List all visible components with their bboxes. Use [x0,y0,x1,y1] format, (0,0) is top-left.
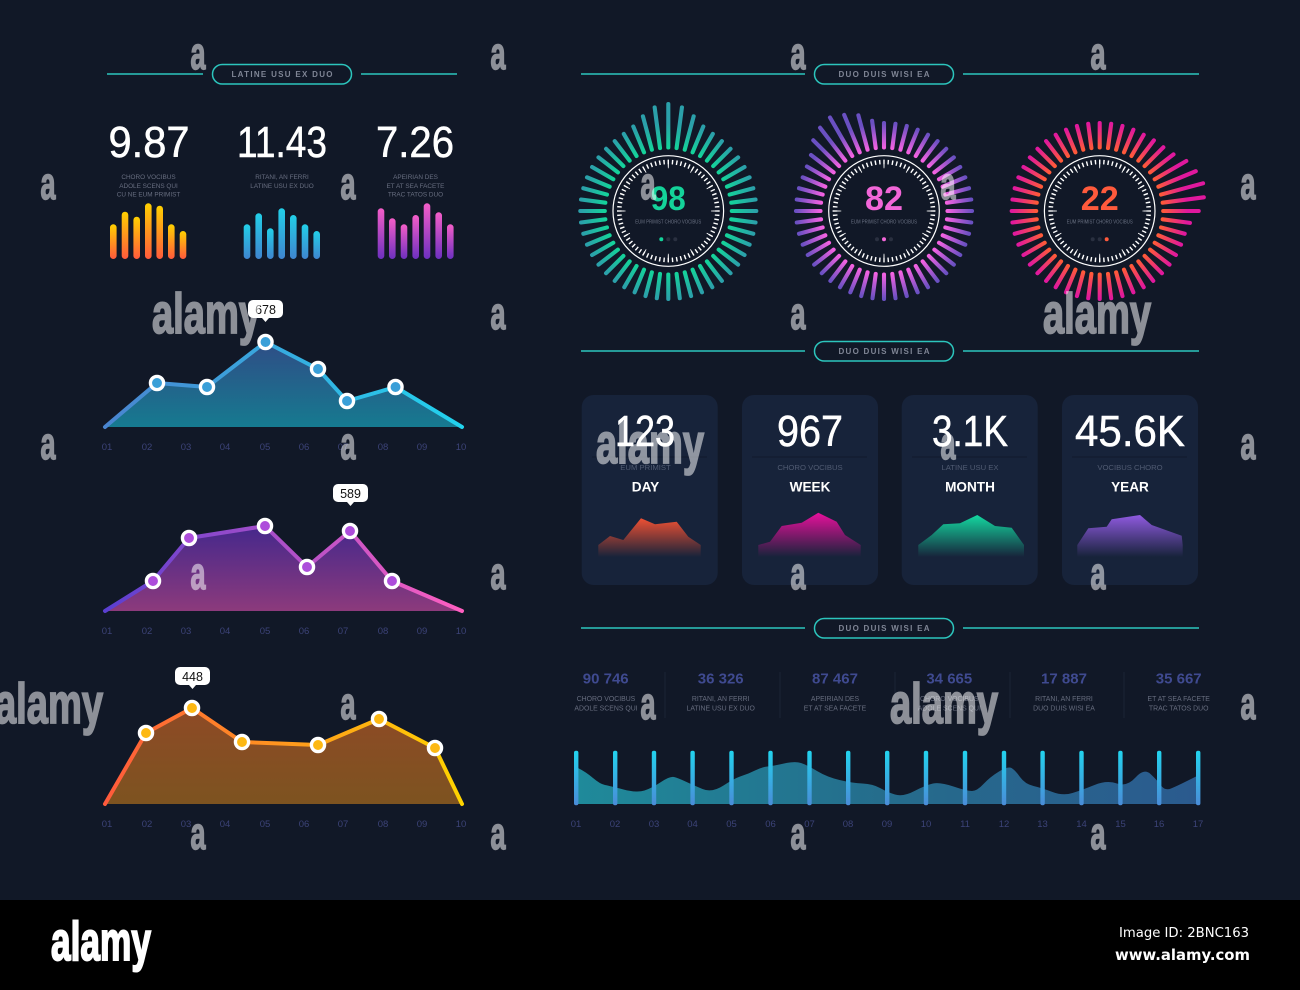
stat: 87 467: 87 467 [812,670,858,688]
watermark: letter marks [40,28,1256,859]
watermark: letter marks: a [340,678,356,729]
mini area: day [598,518,701,557]
watermark: letter marks: a [190,28,206,79]
footer band: Image ID: 2BNC163 [1119,925,1249,941]
stat: 11.43: 11.43 [237,118,327,167]
header: gauges: DUO DUIS WISI EA [838,70,930,79]
footer band [0,900,1300,990]
tooltip: 678: 678 [255,303,276,317]
line chart: blue 678 [102,300,466,453]
axis labels: 16 [1154,819,1164,830]
gauge: 98 [580,104,756,299]
axis labels: 04 [220,442,230,453]
axis labels: 04 [687,819,698,830]
stat: 34 665: CHORO VOCIBUS [920,696,979,703]
axis labels: 13 [1037,819,1048,830]
axis labels: 03 [181,819,191,830]
axis labels: 02 [142,442,152,453]
stat: 17 887: DUO DUIS WISI EA [1033,706,1095,712]
axis labels: 01 [571,819,581,830]
axis labels: 07 [338,626,348,637]
dial [829,156,939,266]
card: year: 45.6K [1075,407,1185,456]
card: day: DAY [632,480,659,494]
axis labels: 03 [181,442,191,453]
stat: 17 887 [1033,670,1095,712]
header: timeline [581,618,1199,638]
header: gauges [581,64,1199,84]
stat: 9.87 [108,118,190,259]
axis labels: 05 [726,819,737,830]
tooltip: 448: 448 [182,670,203,684]
stat: 36 326: RITANI, AN FERRI [692,696,750,703]
axis labels: 06 [299,442,309,453]
card: week [742,395,878,585]
watermark: letter marks: a [340,418,356,469]
watermark: letter marks: a [1240,158,1256,209]
axis labels: 08 [378,626,388,637]
gauge: 82: 82 [865,180,903,218]
axis labels: 05 [260,626,270,637]
footer band: www.alamy.com [1115,946,1250,964]
axis labels: 09 [417,626,427,637]
tooltip: 448 [175,667,210,689]
mini bar chart: orange [110,203,186,259]
stat: 90 746: ADOLE SCENS QUI [574,706,638,712]
axis labels: 07 [338,819,348,830]
axis labels: 05 [260,442,270,453]
mini area: week [758,513,861,557]
watermark: letter marks: a [790,548,806,599]
axis labels: 11 [960,819,970,830]
vertical bars [574,751,1200,805]
watermark: letter marks: a [490,548,506,599]
axis labels: 15 [1115,819,1126,830]
axis labels [102,819,466,830]
gauge: 22: 22 [1081,180,1119,218]
axis labels: 03 [181,626,191,637]
stat: 35 667: 35 667 [1156,670,1202,688]
axis labels: 07 [338,442,348,453]
card: week: WEEK [790,480,831,494]
axis labels: 06 [299,626,309,637]
tooltip: 589 [333,484,368,506]
card: day: EUM PRIMIST [620,463,671,472]
stat: 9.87: CHORO VOCIBUS [121,174,176,181]
card: month: 3.1K [932,407,1008,456]
stat: 90 746 [574,670,638,712]
axis labels: 09 [417,819,427,830]
axis labels [102,626,466,637]
watermark: word marks: alamy [152,282,260,346]
watermark: letter marks: a [40,418,56,469]
mini bar chart: purple [378,203,454,259]
card: week: 967 [777,407,843,456]
mini area: year [1077,515,1183,557]
axis labels: 10 [921,819,931,830]
axis labels: 14 [1076,819,1087,830]
tooltip: 678 [248,300,283,322]
card: year: VOCIBUS CHORO [1097,463,1163,472]
axis labels: 08 [843,819,853,830]
watermark: letter marks: a [940,158,956,209]
wave chart [571,751,1203,830]
card: month: MONTH [945,480,995,494]
watermark: letter marks: a [640,678,656,729]
stat: 7.26: APEIRIAN DES [393,174,438,181]
rays [1012,123,1204,299]
watermark: letter marks: a [640,158,656,209]
stat: 90 746: 90 746 [583,670,629,688]
stat: 87 467 [804,670,867,712]
stat: 35 667 [1147,670,1210,712]
axis labels: 06 [765,819,776,830]
watermark: word marks: alamy [890,672,998,736]
watermark: letter marks: a [790,808,806,859]
indicator dots [875,237,893,241]
axis labels: 06 [299,819,309,830]
header: cards: DUO DUIS WISI EA [838,347,930,356]
indicator dots [659,237,677,241]
stat: 7.26: ET AT SEA FACETE [387,183,444,190]
card: day: 123 [615,407,675,456]
stat: 36 326: LATINE USU EX DUO [686,706,756,712]
watermark: letter marks: a [490,288,506,339]
stat: 7.26: TRAC TATOS DUO [388,192,443,199]
axis labels: 01 [102,626,112,637]
stat: 87 467: APEIRIAN DES [811,696,860,703]
line chart: orange 448 [102,667,466,830]
stat row [574,670,1210,712]
footer band: alamy [51,910,151,972]
stat: 34 665: ADOLE SCENS QUI [918,706,981,712]
axis labels: 01 [102,819,112,830]
stat: 17 887: 17 887 [1041,670,1087,688]
stat: 7.26: 7.26 [376,118,454,167]
stat: 35 667: TRAC TATOS DUO [1149,706,1209,712]
stat: 11.43 [237,118,327,259]
stat: 11.43: RITANI, AN FERRI [255,174,309,181]
tooltip: 589: 589 [340,487,361,501]
axis labels [102,442,466,453]
axis labels: 02 [142,626,152,637]
watermark: word marks [0,282,1151,736]
stat: 90 746: CHORO VOCIBUS [577,696,636,703]
axis labels: 09 [417,442,427,453]
stat: 7.26 [376,118,454,259]
axis labels: 04 [220,626,230,637]
axis labels: 10 [456,626,466,637]
watermark: word marks: alamy [1043,282,1151,346]
watermark: letter marks: a [340,158,356,209]
axis labels: 02 [610,819,620,830]
stat: 9.87: 9.87 [108,118,190,167]
card: month [902,395,1038,585]
axis labels: 08 [378,819,388,830]
watermark: word marks: alamy [596,412,704,476]
axis labels: 01 [102,442,112,453]
axis labels: 10 [456,819,466,830]
axis labels: 02 [142,819,152,830]
rays [580,104,756,299]
card: day [582,395,718,585]
axis labels [571,819,1203,830]
axis labels: 04 [220,819,230,830]
dial [613,156,724,266]
stat: 11.43: LATINE USU EX DUO [250,183,314,190]
watermark: letter marks: a [1240,418,1256,469]
dial [1044,156,1155,266]
axis labels: 12 [999,819,1009,830]
watermark: letter marks: a [190,808,206,859]
card: year [1062,395,1198,585]
stat: 36 326 [686,670,756,712]
watermark: letter marks: a [790,288,806,339]
header: latine usu ex duo: LATINE USU EX DUO [232,70,332,79]
stat: 87 467: ET AT SEA FACETE [804,706,867,712]
stat: 17 887: RITANI, AN FERRI [1035,696,1093,703]
stat: 9.87: CU NE EUM PRIMIST [117,192,180,199]
watermark: letter marks: a [1090,28,1106,79]
axis labels: 10 [456,442,466,453]
axis labels: 07 [804,819,815,830]
stat: 9.87: ADOLE SCENS QUI [119,183,178,190]
gauge: 82: EUM PRIMIST CHORO VOCIBUS [851,220,918,226]
watermark: letter marks: a [1240,678,1256,729]
gauge: 98: 98 [651,180,686,218]
card: week: CHORO VOCIBUS [777,463,843,472]
stat: 35 667: ET AT SEA FACETE [1147,696,1210,703]
header: cards [581,342,1199,361]
stat: 34 665 [918,670,981,712]
card: month: LATINE USU EX [941,463,999,472]
gauge: 22 [1012,123,1204,299]
watermark: letter marks: a [490,28,506,79]
line chart: purple 589 [102,484,466,637]
mini bar chart: blue [244,208,320,259]
mini area: month [918,515,1024,557]
gauge: 82 [796,115,972,299]
gauge: 98: EUM PRIMIST CHORO VOCIBUS [635,220,702,226]
stat: 34 665: 34 665 [926,670,972,688]
card: year: YEAR [1111,480,1149,494]
watermark: letter marks: a [40,158,56,209]
watermark: letter marks: a [790,28,806,79]
stat: 36 326: 36 326 [698,670,744,688]
watermark: letter marks: a [190,548,206,599]
axis labels: 08 [378,442,388,453]
axis labels: 09 [882,819,892,830]
gauge: 22: EUM PRIMIST CHORO VOCIBUS [1067,220,1133,226]
watermark: letter marks: a [1090,548,1106,599]
indicator dots [1091,237,1109,241]
axis labels: 03 [649,819,659,830]
axis labels: 17 [1193,819,1203,830]
watermark: letter marks: a [1090,808,1106,859]
watermark: letter marks: a [940,418,956,469]
watermark: letter marks: a [490,808,506,859]
header: latine usu ex duo [107,64,457,84]
header: timeline: DUO DUIS WISI EA [838,624,930,633]
axis labels: 05 [260,819,270,830]
rays [796,115,972,299]
